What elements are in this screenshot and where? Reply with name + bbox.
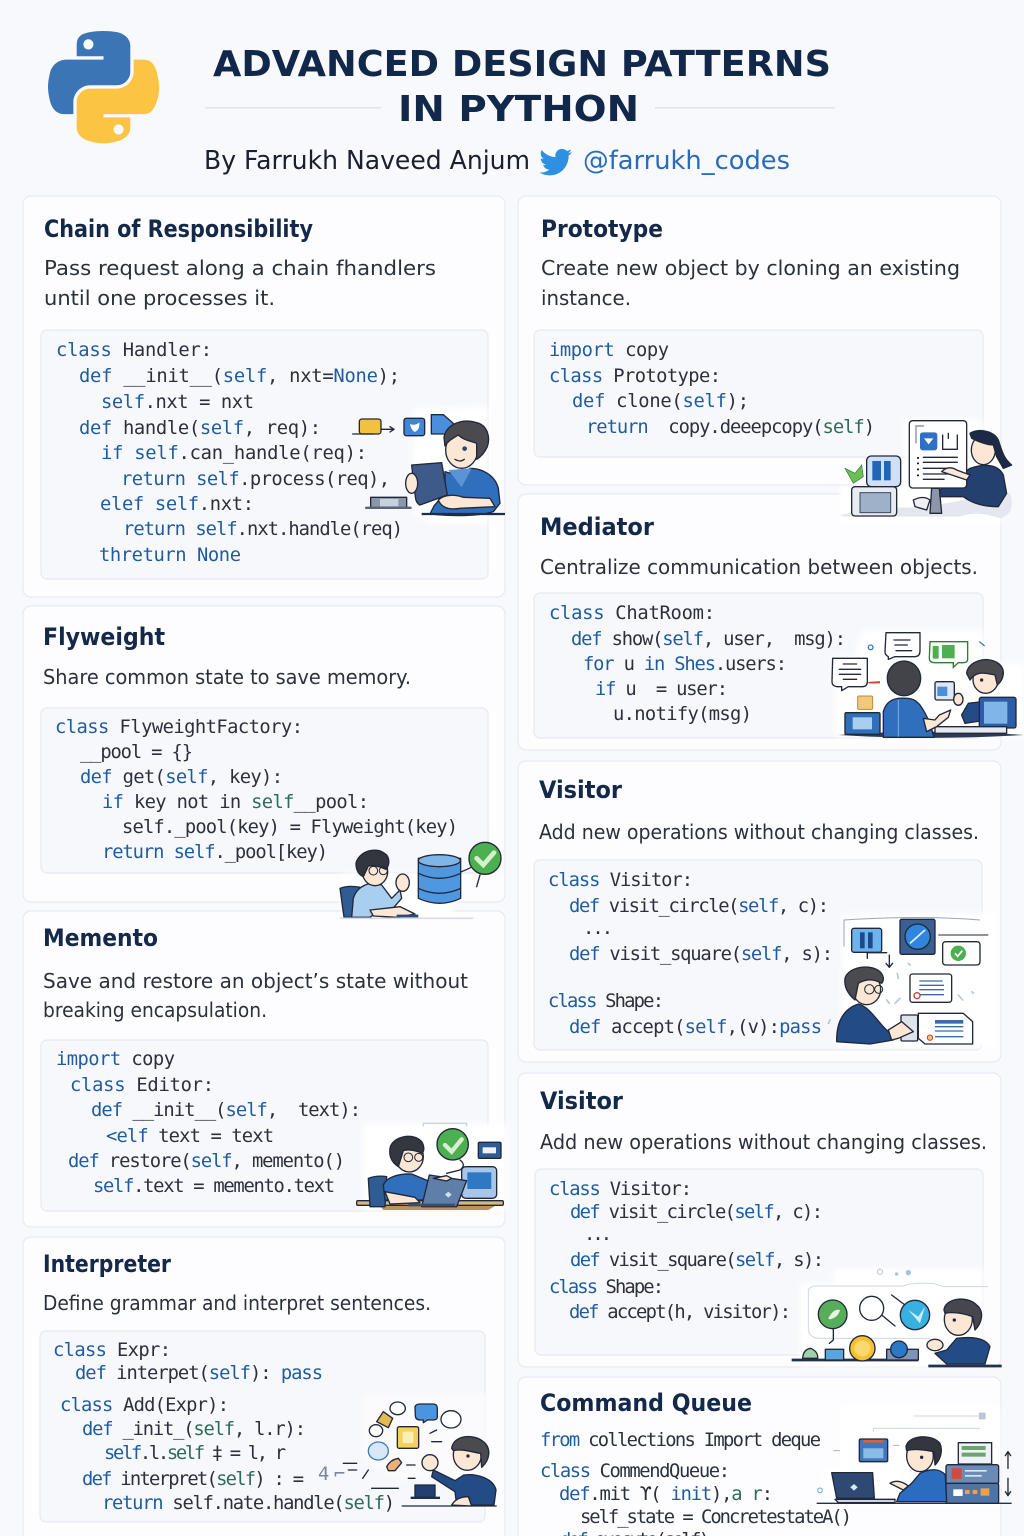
heading: Chain of Responsibility [44,215,313,243]
code block: def interpet(self): pass [75,1363,323,1384]
code block [534,860,982,1050]
heading: Visitor [540,1087,623,1115]
code block: def handle(self, req): [79,418,321,439]
code block: def accept(h, visitor): [569,1302,791,1323]
code block: self_state = ConcretestateA() [580,1507,852,1528]
code block: class Prototype: [549,366,721,387]
code block: for u in Shes.users: [583,654,787,675]
illustration: developer with database [340,842,501,920]
title: IN PYTHON [398,89,639,130]
code block [41,1040,488,1211]
panel: flyweight [23,606,505,920]
author byline: By Farrukh Naveed Anjum [204,146,530,176]
description: Centralize communication between objects. [540,555,978,579]
heading: Prototype [541,215,663,243]
code block: import copy [549,340,669,361]
heading: Interpreter [43,1250,171,1278]
code block: def interpret(self) : = [82,1469,304,1490]
code block: def.mit ϒ( init),a r: [559,1484,773,1505]
description: Save and restore an object’s state without [43,969,468,993]
code block: return self.nate.handle(self) [102,1493,395,1514]
description: Create new object by cloning an existing [541,256,960,280]
code block: from collections Import deque [540,1430,821,1451]
code block: return self.nxt.handle(req) [123,519,403,540]
code block: class FlyweightFactory: [55,717,303,738]
icon: twitter bird [539,149,572,175]
panel: memento [23,911,507,1227]
code block [534,593,983,738]
illustration: developer with queue machine [817,1407,1012,1505]
description: instance. [541,286,631,310]
illustration: developer at board [840,420,1012,523]
code block: ... [583,918,613,939]
code block: def __init__(self, nxt=None); [79,366,400,387]
heading: Memento [43,924,158,952]
code block: class Shape: [548,991,664,1012]
panel: prototype [518,196,1012,523]
code block: class Shape: [549,1277,664,1298]
code block: self.nxt = nxt [101,392,254,413]
heading: Command Queue [540,1389,752,1417]
illustration: developer with tablet [353,407,505,523]
heading: Flyweight [43,623,165,651]
title: ADVANCED DESIGN PATTERNS [213,44,831,85]
code block: if self.can_handle(req): [101,443,367,464]
code block: self.text = memento.text [93,1176,335,1197]
code block: if key not in self__pool: [102,792,369,813]
code block: def __init__(self, text): [91,1100,361,1121]
description [541,256,960,310]
illustration: developer with floating symbols [343,1393,497,1506]
code block: def _init_(self, l.r): [82,1419,306,1440]
description: Pass request along a chain fhandlers [44,256,436,280]
illustration: developer with shapes [792,1268,1002,1367]
code block: def visit_circle(self, c): [570,1202,823,1223]
code block: def visit_square(self, s): [569,944,833,965]
code block: class Expr: [53,1340,171,1361]
description: Define grammar and interpret sentences. [43,1291,431,1315]
code block: class Add(Expr): [60,1395,229,1416]
code block: return self._pool[key) [102,842,328,863]
panel: visitor (first) [518,761,1001,1062]
code block: return copy.deeepcopy(self) [586,417,875,438]
code block: class Handler: [56,340,212,361]
code block: def clone(self); [572,391,749,412]
illustration: developer at laptop [357,1123,507,1210]
code block: return self.process(req), [121,469,390,490]
description: Add new operations without changing classes. [539,820,979,844]
code block: <elf text = text [106,1126,274,1147]
description [44,256,436,310]
description: Share common state to save memory. [43,665,411,689]
code block [540,1430,852,1536]
code block: class Editor: [70,1075,214,1096]
heading: Mediator [540,513,654,541]
title [213,44,831,130]
description: until one processes it. [44,286,275,310]
panel: command queue [518,1377,1012,1536]
code block [41,330,488,579]
code block: elef self.nxt: [100,494,254,515]
twitter handle: @farrukh_codes [583,146,790,176]
panel: interpreter [23,1237,505,1536]
illustration: two developers chatting [832,630,1024,738]
code block: def restore(self, memento() [68,1151,345,1172]
code block: def visit_circle(self, c): [569,896,829,917]
code block [534,330,983,457]
header [48,31,835,176]
code block: def show(self, user, msg): [571,629,846,650]
description: Add new operations without changing classes. [540,1130,987,1154]
code block: def accept(self,(v):pass [569,1017,822,1038]
heading: Visitor [539,776,622,804]
code block: import copy [56,1049,175,1070]
code block: def get(self, key): [80,767,283,788]
code block: threturn None [99,545,241,566]
code block: self.l.self ‡ = l, r [104,1443,286,1464]
code block: self._pool(key) = Flyweight(key) [122,817,458,838]
illustration: developer visiting cards [828,913,997,1047]
icon: python logo [48,31,159,143]
code block: if u = user: [595,679,728,700]
panel: visitor (second) [518,1073,1002,1367]
description [43,969,468,1022]
panel: mediator [518,494,1024,750]
code block: class Visitor: [548,870,693,891]
code block [535,1169,983,1355]
code block: class CommendQueue: [540,1461,730,1482]
code block: 4⌐ [318,1464,345,1485]
code block: ... [584,1224,612,1245]
code block: __pool = {} [80,742,193,763]
code block: def visit_square(self, s): [570,1250,824,1271]
code block: class ChatRoom: [549,603,715,624]
code block [40,1331,485,1522]
code block: u.notify(msg) [613,704,752,725]
code block [41,708,488,873]
description: breaking encapsulation. [43,998,267,1022]
code block: class Visitor: [549,1179,692,1200]
panel: chain of responsibility [23,196,505,597]
